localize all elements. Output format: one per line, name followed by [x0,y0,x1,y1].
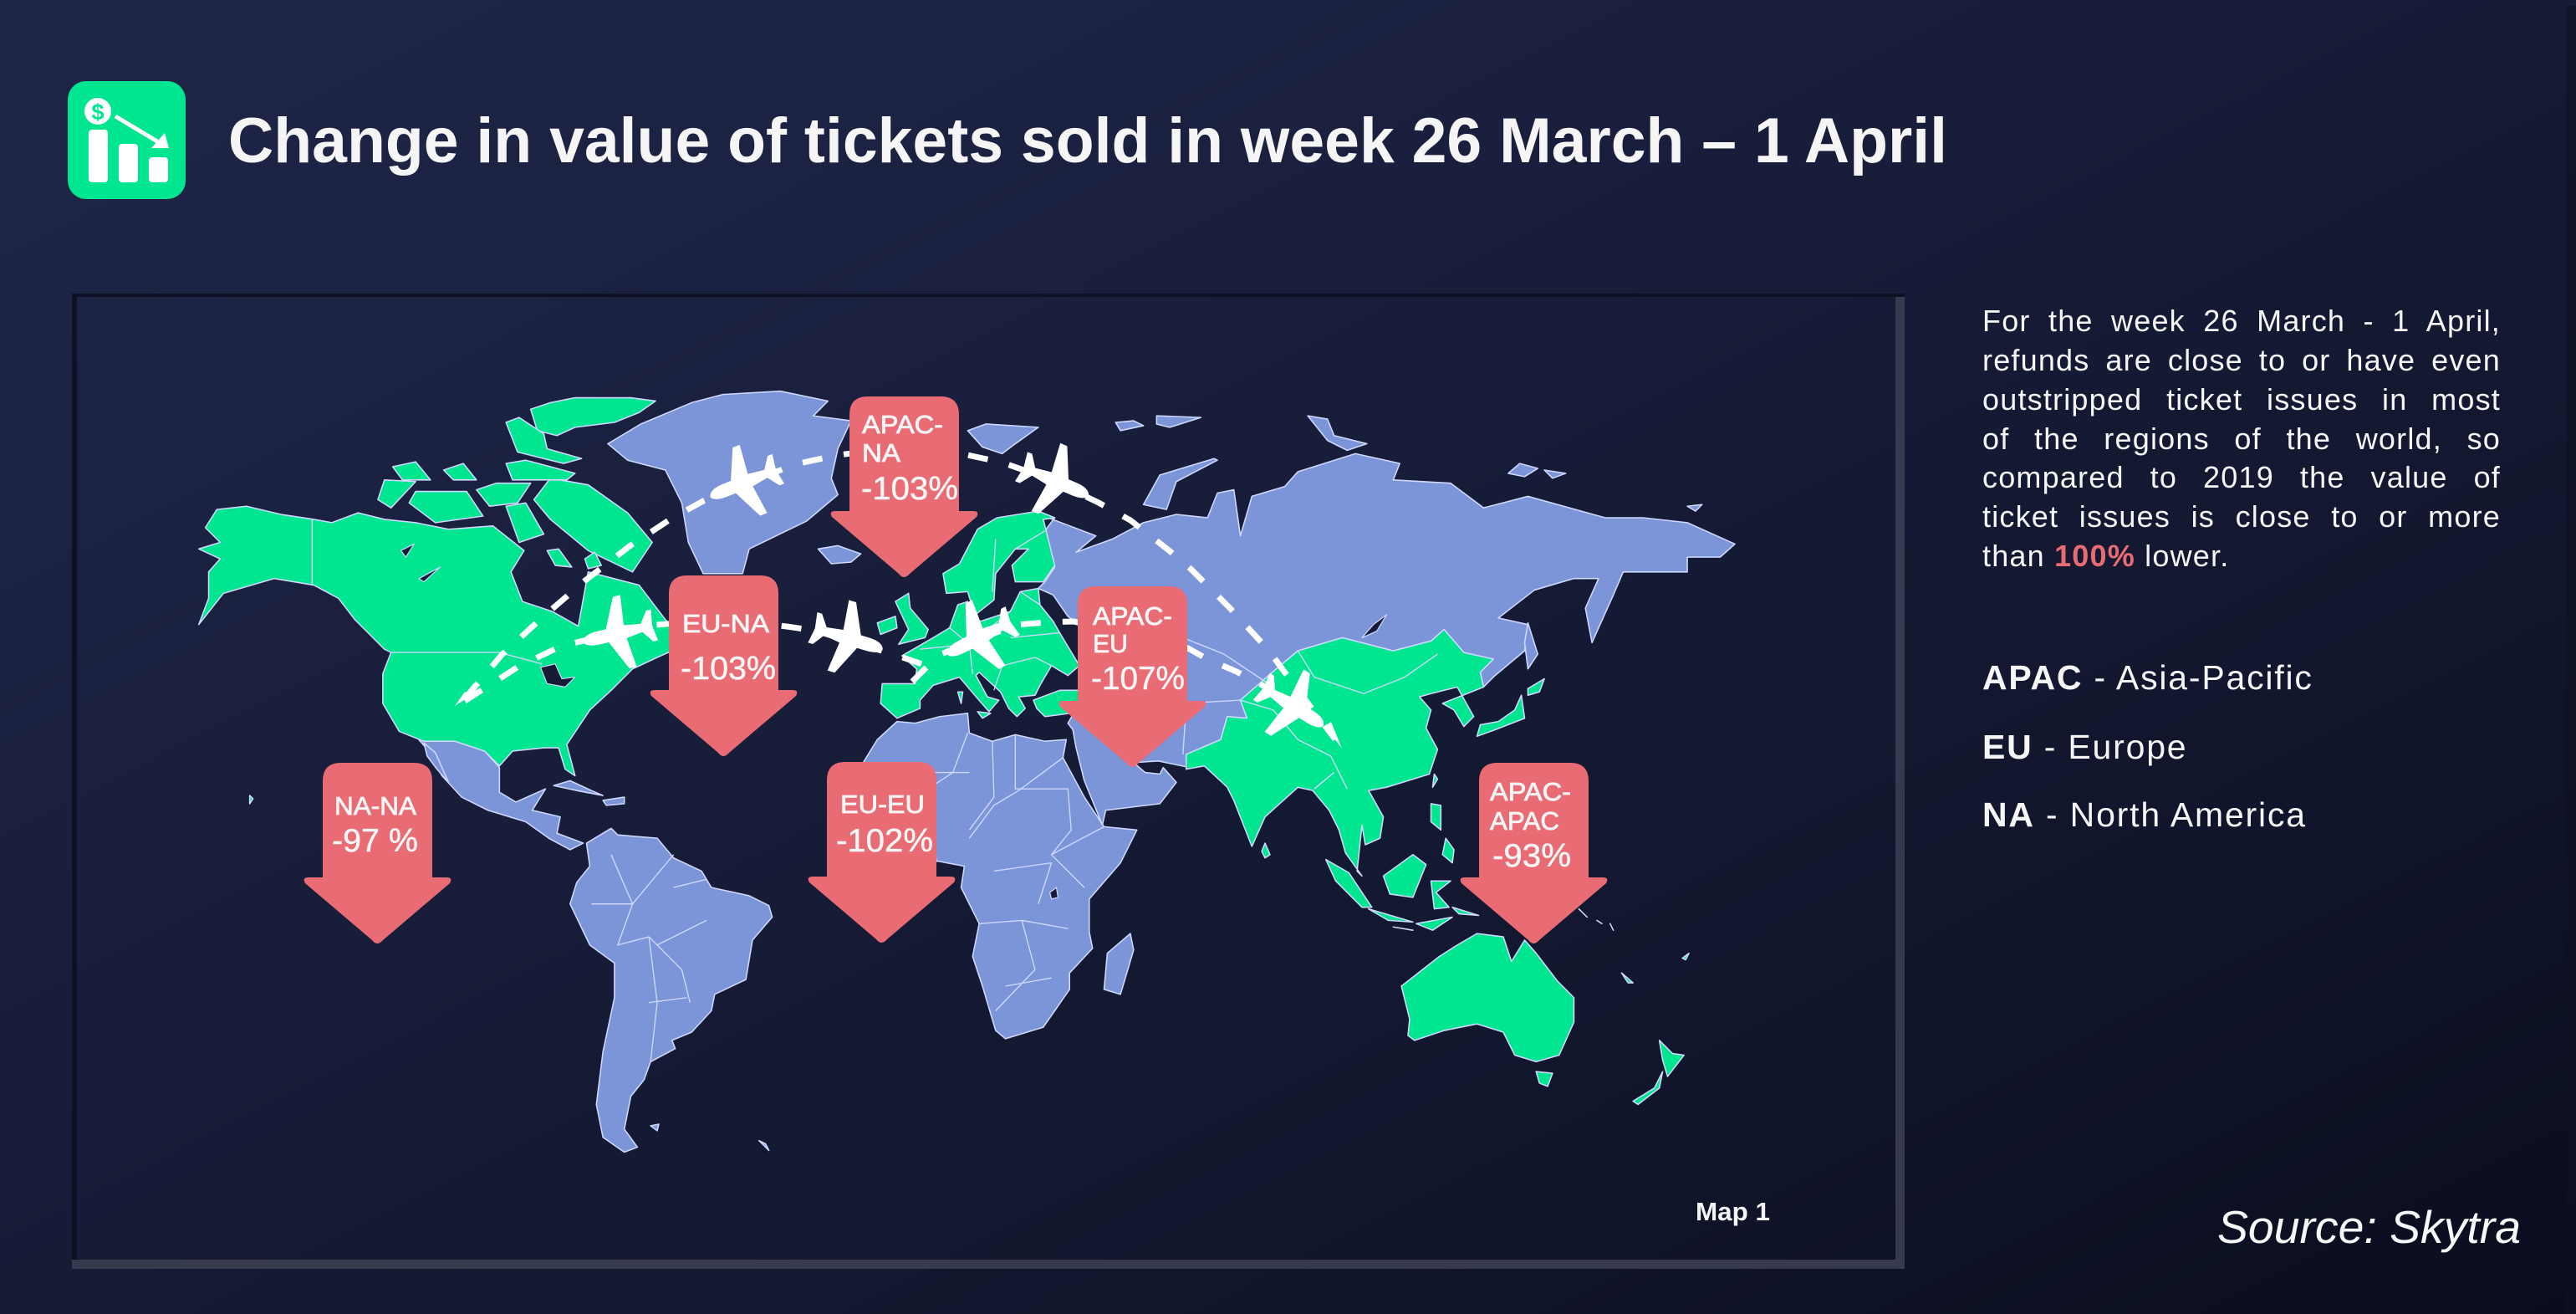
callout arrow: NA-NA [304,763,451,943]
map caption: Map 1 [1696,1197,1770,1226]
callout arrow: EU-EU: -102% [836,823,933,859]
commentary text block: ticket issues is close to or more [1982,499,2501,534]
route: North America to Europe [465,619,936,701]
commentary text block: For the week 26 March - 1 April, [1982,304,2501,338]
icon: falling value bar chart: $ [91,100,105,125]
dark inland seas and lakes [400,544,1386,899]
callout arrow: APAC-NA: -103% [861,471,958,507]
commentary text block [1982,304,2501,573]
panel: map frame [72,294,1905,1269]
callout arrow: EU-EU [809,762,955,943]
callout arrow: NA-NA: -97 % [332,823,418,859]
callout arrow: APAC-APAC: -93% [1492,838,1571,874]
region: non-focus land in blue [417,391,1735,1152]
callout arrow: APAC-APAC [1461,763,1607,943]
region: focus land in green [199,398,1689,1104]
callout arrow: APAC-NA [831,396,977,577]
callout arrow: APAC-APAC: APAC [1490,806,1559,836]
plane over China [1242,655,1344,757]
callout arrow: EU-NA [650,575,797,756]
callout arrow: EU-NA: -103% [681,651,776,687]
commentary text block: of the regions of the world, so [1982,422,2501,456]
route tips [455,692,1342,749]
callout arrow: EU-NA: EU-NA [682,609,769,638]
commentary text block: outstripped ticket issues in most [1982,382,2501,417]
plane over northern Russia [1007,432,1104,529]
region legend: EU - Europe [1982,728,2187,766]
region legend: APAC - Asia-Pacific [1982,658,2313,697]
callout arrow: APAC-EU: EU [1093,629,1128,658]
commentary text block: refunds are close to or have even [1982,343,2501,377]
region legend [1982,658,2313,834]
route: North America to Asia via the Arctic [465,447,1335,739]
callout arrow: EU-EU: EU-EU [840,790,925,819]
commentary text block: than 100% lower. [1982,539,2229,573]
plane over Greenland [696,435,792,530]
source note: Source: Skytra [2217,1201,2521,1253]
callout arrow: APAC-EU [1059,586,1206,767]
route: Europe to Asia [912,621,1265,687]
country borders [312,519,1437,1061]
region legend: NA - North America [1982,795,2307,834]
plane over Canada [574,589,663,677]
callout arrow: APAC-EU: APAC- [1093,601,1172,631]
callout arrow: APAC-EU: -107% [1091,661,1185,697]
commentary text block: compared to 2019 the value of [1982,460,2501,494]
plane over Europe [931,588,1029,687]
callout arrow: NA-NA: NA-NA [334,791,416,821]
title: Change in value of tickets sold in week 26 March – 1 April [228,105,1947,176]
flight routes [465,447,1335,739]
icon: falling value bar chart [68,81,186,199]
plane over the Atlantic [802,592,894,684]
callout arrow: APAC-NA: NA [862,438,900,468]
world map [199,391,1735,1152]
callout arrow: APAC-APAC: APAC- [1490,777,1571,806]
planes [574,432,1344,757]
callout arrow: APAC-NA: APAC- [862,410,943,439]
